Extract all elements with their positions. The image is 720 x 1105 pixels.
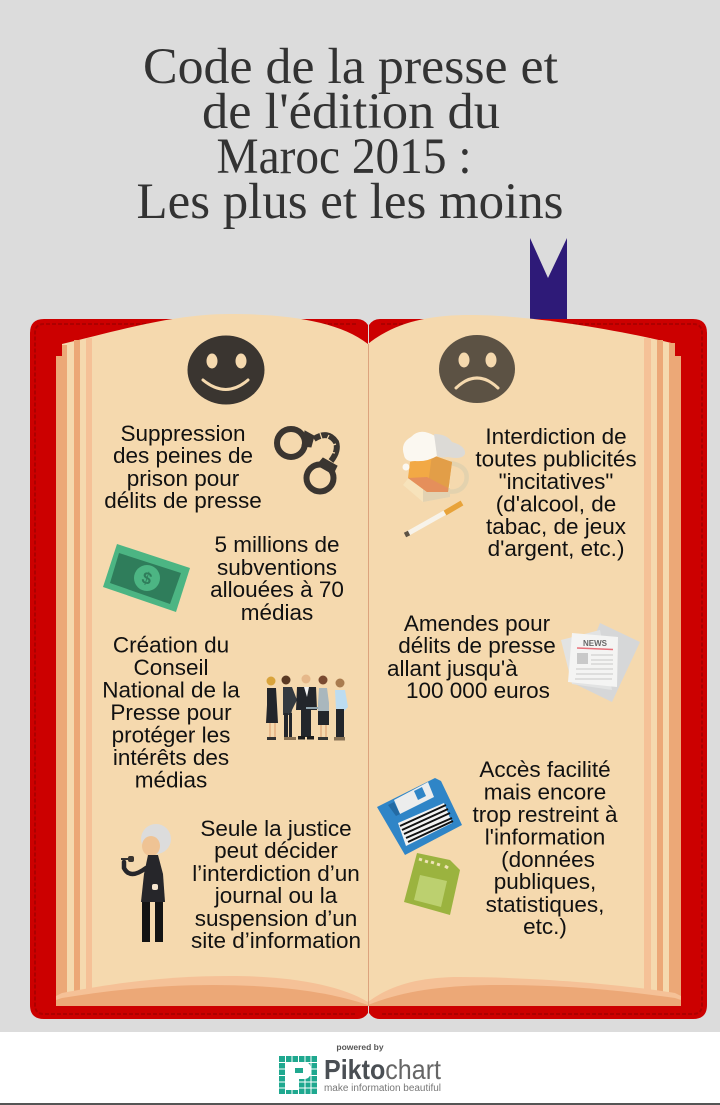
text: justice: peut décider	[214, 838, 338, 863]
title: Les plus et les moins	[136, 173, 564, 229]
icon: newspapers: NEWS	[583, 639, 608, 648]
text: justice: suspension d’un	[195, 906, 357, 931]
title	[136, 38, 564, 229]
man 5	[334, 678, 348, 740]
footer	[0, 1032, 720, 1105]
text: publicités: Interdiction de	[485, 424, 627, 449]
icon: sad face	[439, 335, 515, 403]
text: publicités: "incitatives"	[499, 469, 613, 494]
text: accès à l'information: etc.)	[523, 914, 567, 939]
icon: judge with gavel	[121, 824, 171, 942]
book cover	[30, 319, 707, 1019]
icon: newspapers	[561, 623, 640, 702]
panel: left page	[56, 314, 368, 1006]
text: justice: site d’information	[191, 928, 361, 953]
logo wordmark: Piktochart	[324, 1054, 441, 1085]
icon: banknote	[103, 544, 190, 612]
text: subventions: 5 millions de	[214, 532, 340, 557]
text: subventions: allouées à 70	[210, 577, 344, 602]
text: justice	[191, 816, 361, 953]
logo mark	[279, 1056, 317, 1094]
text: publicités	[475, 424, 637, 561]
text: accès à l'information: trop restreint à	[472, 802, 618, 827]
panel: right page	[368, 315, 681, 1006]
text: conseil national	[102, 632, 240, 792]
text: publicités: (d'alcool, de	[496, 492, 616, 516]
icon: banknote: $	[139, 568, 155, 589]
text: justice: journal ou la	[214, 883, 338, 908]
text: amendes	[387, 611, 556, 703]
text: suppression des peines: Suppression	[120, 421, 246, 446]
text: accès à l'information: publiques,	[494, 869, 596, 894]
icon: cigarette	[405, 503, 462, 535]
text: conseil national: intérêts des	[113, 745, 229, 770]
text: publicités: tabac, de jeux	[486, 514, 627, 539]
text: conseil national: médias	[135, 768, 207, 792]
icon: group of people	[266, 674, 348, 740]
man 2	[282, 676, 297, 740]
text: amendes: Amendes pour	[404, 611, 551, 636]
text: conseil national: protéger les	[112, 722, 230, 748]
text: subventions: médias	[241, 600, 313, 625]
text: conseil national: Conseil	[133, 655, 209, 680]
woman 1	[266, 676, 278, 740]
icon: happy face	[188, 336, 264, 404]
text: accès à l'information: l'information	[485, 824, 605, 850]
title: de l'édition du	[202, 83, 500, 139]
text: subventions: subventions	[217, 555, 337, 580]
text: amendes: allant jusqu'à	[387, 656, 518, 681]
text: suppression des peines	[104, 421, 262, 513]
text: justice: l’interdiction d’un	[192, 861, 360, 886]
icon: memory card	[404, 853, 460, 915]
text: suppression des peines: prison pour	[127, 466, 240, 491]
icon: beer mug	[402, 432, 467, 502]
bookmark ribbon	[530, 238, 567, 322]
text: conseil national: Création du	[113, 632, 229, 658]
text: justice: Seule la justice	[200, 816, 352, 841]
text: amendes: délits de presse	[398, 633, 556, 658]
text: conseil national: Presse pour	[110, 700, 232, 725]
text: subventions	[210, 532, 344, 625]
text: conseil national: National de la	[102, 678, 240, 702]
icon: handcuffs	[277, 429, 337, 492]
powered by label: powered by	[336, 1042, 384, 1052]
text: accès à l'information: mais encore	[484, 780, 606, 804]
man 3	[296, 674, 320, 740]
centre fold line	[368, 344, 370, 1006]
logo tagline: make information beautiful	[324, 1083, 441, 1094]
text: suppression des peines: des peines de	[113, 443, 253, 468]
text: accès à l'information: Accès facilité	[479, 757, 611, 782]
text: publicités: toutes publicités	[475, 446, 637, 472]
text: suppression des peines: délits de presse	[104, 488, 262, 513]
title: Maroc 2015 :	[216, 128, 472, 184]
open book	[30, 314, 707, 1019]
woman 4	[318, 676, 329, 740]
text: accès à l'information: (données	[501, 847, 595, 872]
text: accès à l'information: statistiques,	[486, 892, 604, 917]
icon: floppy disk	[377, 778, 462, 855]
text: accès à l'information	[472, 757, 618, 939]
title: Code de la presse et	[143, 38, 558, 94]
text: publicités: d'argent, etc.)	[488, 536, 624, 561]
text: amendes: 100 000 euros	[406, 678, 550, 703]
